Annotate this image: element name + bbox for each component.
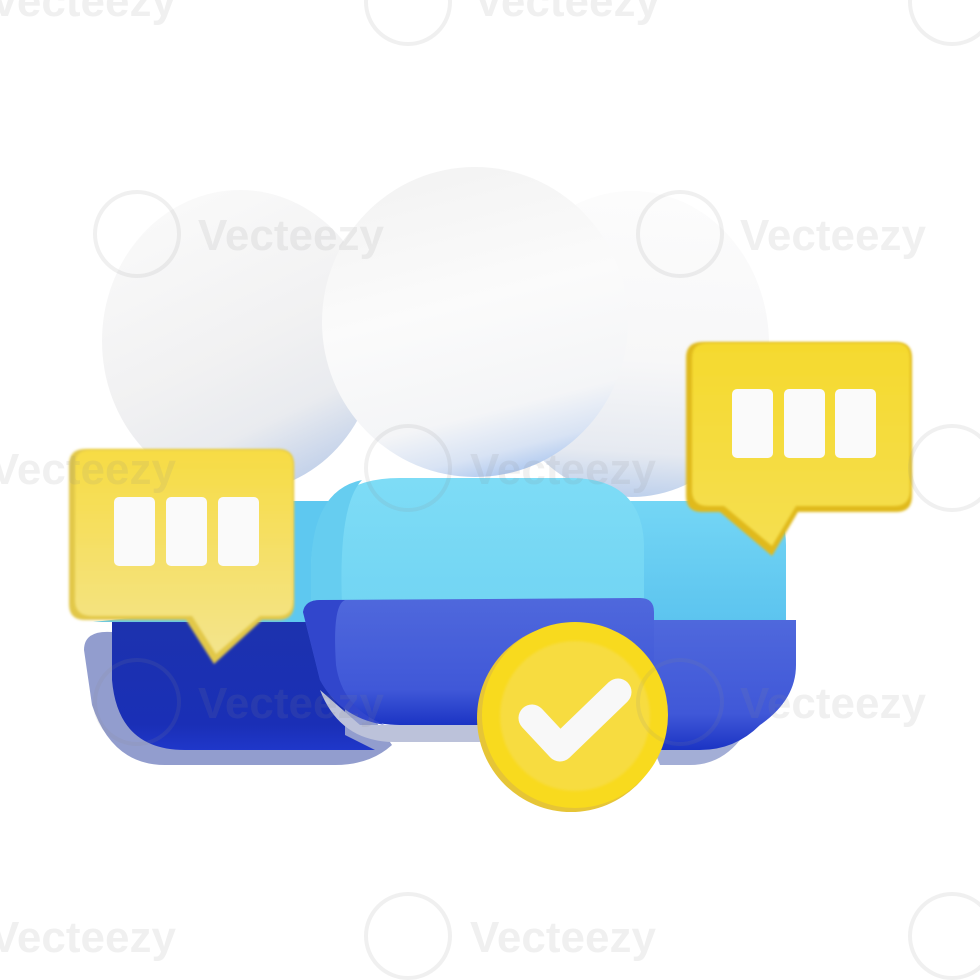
left body base	[112, 622, 375, 750]
right person	[495, 191, 796, 765]
watermarks: Vecteezy	[740, 211, 926, 260]
center base left edge	[303, 600, 385, 725]
left head	[102, 190, 378, 492]
dot	[835, 389, 876, 458]
right body top	[630, 501, 786, 622]
dot	[166, 497, 207, 566]
center body shadow	[320, 690, 490, 742]
left body top	[93, 501, 345, 622]
right head	[495, 191, 769, 497]
dot	[218, 497, 259, 566]
center person	[303, 167, 654, 742]
watermarks: Vecteezy	[470, 913, 656, 962]
watermarks: Vecteezy	[470, 445, 656, 494]
center body left edge	[311, 480, 362, 605]
left person	[84, 190, 392, 765]
right body base	[640, 620, 796, 750]
right base shadow	[650, 740, 740, 765]
watermarks: Vecteezy	[198, 211, 384, 260]
center body base	[303, 598, 654, 725]
center body top	[311, 478, 644, 605]
right speech bubble	[686, 342, 912, 556]
watermarks: Vecteezy	[740, 679, 926, 728]
left speech bubble	[69, 449, 294, 664]
dot	[732, 389, 773, 458]
watermarks: Vecteezy	[198, 679, 384, 728]
dot	[784, 389, 825, 458]
dot	[114, 497, 155, 566]
left body base shadow	[84, 632, 392, 765]
check mark	[532, 692, 618, 748]
check badge	[477, 622, 668, 812]
center head	[322, 167, 628, 477]
